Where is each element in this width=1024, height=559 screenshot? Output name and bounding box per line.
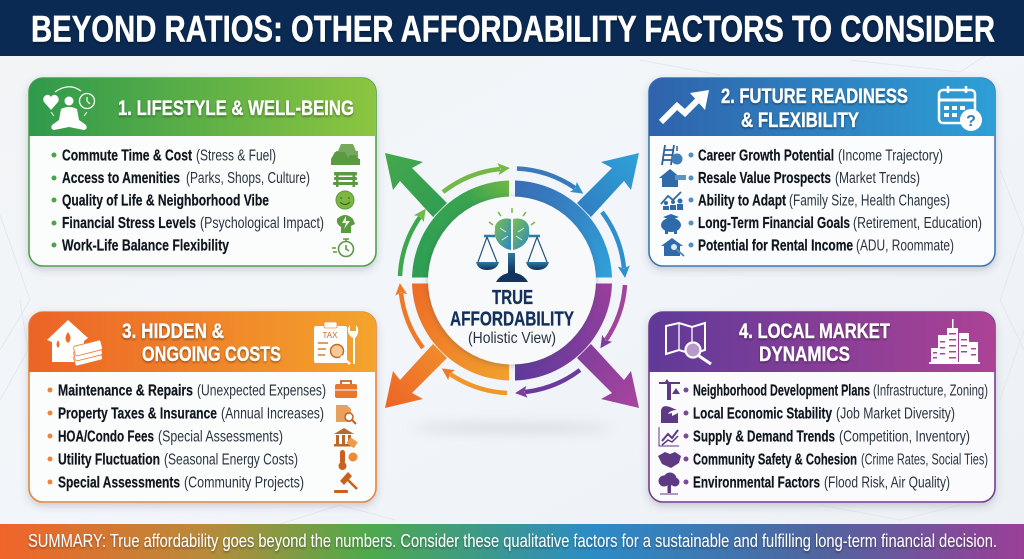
panel 1 header band (29, 78, 376, 136)
hub title second line: AFFORDABILITY (450, 308, 575, 330)
icon: head with lightning bolt (337, 215, 355, 233)
icon: thermometer and coin (338, 450, 358, 470)
panel 1 list: Work-Life Balance Flexibility (62, 238, 229, 254)
icon: house with tag (659, 169, 686, 187)
panel 2 list (688, 148, 982, 254)
summary bar (0, 524, 1024, 559)
panel 3 list: HOA/Condo Fees (58, 428, 154, 446)
icon: tax document with magnifier (336, 405, 356, 424)
panel 3 list: (Annual Increases) (221, 406, 324, 422)
panel 1 list: (Stress & Fuel) (196, 148, 276, 164)
panel 1 list: Commute Time & Cost (62, 148, 192, 164)
panel 1 heading: 1. LIFESTYLE & WELL-BEING (118, 97, 354, 120)
panel 3 list: Utility Fluctuation (58, 452, 160, 468)
panel 4 list: (Job Market Diversity) (836, 406, 955, 422)
panel 1 list: Financial Stress Levels (62, 215, 196, 232)
panel 2 heading: 2. FUTURE READINESS (721, 85, 908, 108)
panel 2 heading: & FLEXIBILITY (741, 109, 859, 132)
panel 3 list: (Community Projects) (184, 474, 304, 492)
arrow: up-right to future readiness (577, 153, 639, 217)
panel 2 list: Career Growth Potential (698, 148, 834, 164)
arrow: down-right to market dynamics (577, 344, 639, 408)
hub circle (428, 196, 596, 364)
icon: tree with droplet (658, 472, 680, 494)
panel: local market dynamics (649, 312, 995, 502)
icon: map with magnifier (666, 323, 711, 364)
icon: calendar with question mark: ? (966, 113, 976, 130)
panel 1 list (52, 148, 324, 254)
panel: hidden and ongoing costs (29, 312, 376, 502)
icon: factory (661, 406, 678, 423)
panel 2 heading (721, 85, 908, 132)
icon: gavel (334, 472, 357, 493)
panel 2 header band (649, 78, 995, 136)
panel 4 list: Neighborhood Development Plans (693, 382, 870, 400)
icon: family and chart (661, 192, 683, 210)
icon: leaking house and cash (47, 320, 103, 366)
panel 2 list: (Market Trends) (835, 170, 920, 187)
icon: tax clipboard with magnifier and wrench (314, 322, 358, 364)
icon: piggy bank with cap (661, 214, 681, 234)
central diagram (385, 153, 639, 432)
panel 4 list: (Flood Risk, Air Quality) (824, 474, 950, 492)
panel 4 heading (739, 320, 890, 366)
panel 2 list: (Family Size, Health Changes) (789, 192, 950, 210)
icon: city skyline (929, 319, 980, 364)
hub title: TRUE (492, 287, 533, 309)
panel 1 list: (Parks, Shops, Culture) (186, 170, 310, 187)
icon: park bench (333, 172, 358, 187)
icon: toolbox (335, 381, 357, 398)
panel: lifestyle and well-being (29, 78, 376, 266)
panel 4 list: Supply & Demand Trends (693, 428, 835, 446)
icon: rising arrow (661, 90, 709, 122)
panel 3 list: Property Taxes & Insurance (58, 406, 217, 422)
cycle arrows (400, 168, 625, 393)
icon: construction crane (659, 379, 680, 400)
arrow: up-left to lifestyle (385, 153, 447, 217)
panel 1 list: (Psychological Impact) (200, 215, 324, 232)
hub subtitle: (Holistic View) (468, 330, 556, 347)
icon: cars in traffic (331, 144, 360, 165)
panel 3 heading: 3. HIDDEN & (122, 320, 224, 343)
panel 3 list (48, 382, 326, 492)
panel 3 header band (29, 312, 376, 372)
panel 4 list (684, 382, 988, 492)
panel 3 list: (Special Assessments) (158, 428, 283, 446)
panel 3 list: (Unexpected Expenses) (197, 382, 326, 400)
title bar (0, 0, 1024, 56)
panel 4 heading: DYNAMICS (759, 343, 850, 366)
panel 4 heading: 4. LOCAL MARKET (739, 320, 890, 343)
panel 4 list: (Competition, Inventory) (839, 428, 970, 446)
icon: bank with tag (334, 428, 358, 448)
panel 2 list: (ADU, Roommate) (856, 238, 954, 254)
panel 4 list: Environmental Factors (693, 474, 820, 492)
icon: calendar with question mark (939, 86, 982, 131)
panel 3 list: Maintenance & Repairs (58, 382, 193, 400)
panel 2 list: (Income Trajectory) (838, 148, 943, 164)
panel: future readiness and flexibility (649, 78, 995, 266)
panel 3 heading (122, 320, 281, 366)
ring: blue quadrant (515, 180, 612, 278)
panel 4 header band (649, 312, 995, 372)
panel 3 list: Special Assessments (58, 474, 180, 492)
icon: career ladder with coin (662, 145, 682, 165)
arrow: down-left to hidden costs (385, 344, 447, 408)
panel 3 heading: ONGOING COSTS (142, 343, 281, 366)
icon: brain over balance scale (476, 208, 549, 282)
panel 2 list: Ability to Adapt (698, 192, 786, 210)
panel 4 list: Community Safety & Cohesion (693, 452, 857, 468)
ring: orange quadrant (412, 284, 509, 380)
panel 3 list: (Seasonal Energy Costs) (164, 452, 298, 468)
panel 1 list: Access to Amenities (62, 170, 180, 187)
icon: handshake (658, 452, 681, 468)
icon: house with key (661, 238, 684, 256)
icon: meditating person with heart and clock (43, 87, 94, 130)
panel 2 list: (Retirement, Education) (853, 215, 982, 232)
icon: chart with trend (659, 427, 679, 446)
icon: stopwatch (332, 239, 354, 256)
panel 2 list: Potential for Rental Income (698, 238, 853, 254)
ring: green quadrant (412, 180, 509, 278)
ring: purple quadrant (515, 284, 612, 380)
panel 4 list: Local Economic Stability (693, 406, 832, 422)
shadow under the hub (412, 424, 612, 432)
icon: tax clipboard with magnifier and wrench: TAX (323, 331, 338, 340)
panel 2 list: Long-Term Financial Goals (698, 215, 850, 232)
panel 2 list: Resale Value Prospects (698, 170, 831, 187)
panel 1 list: Quality of Life & Neighborhood Vibe (62, 192, 269, 210)
icon: smiley (336, 191, 354, 209)
